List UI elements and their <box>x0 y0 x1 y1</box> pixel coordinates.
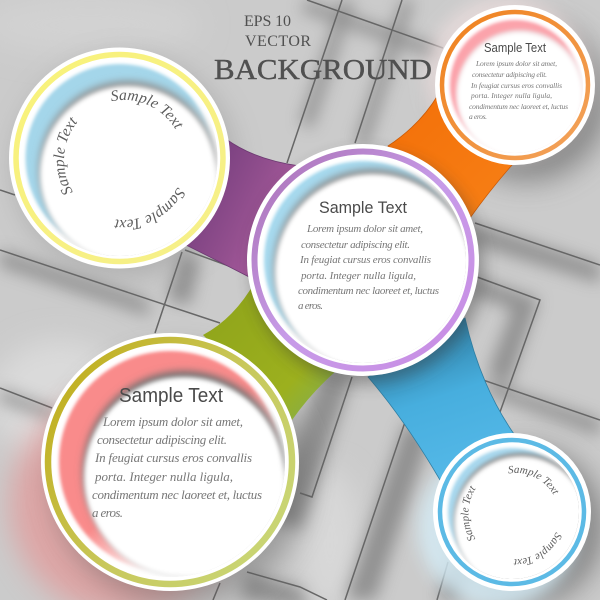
curved text: blue top: Sample Text <box>508 466 558 495</box>
body text: purple circle: porta. Integer nulla ligula, <box>300 270 416 282</box>
body text: orange circle <box>469 59 568 121</box>
curved text: yellow bottom: Sample Text <box>114 188 185 230</box>
crescent: purple circle <box>262 159 466 363</box>
heading: EPS 10 <box>244 13 291 30</box>
body text: green circle <box>92 414 262 520</box>
body text: purple circle: condimentum nec laoreet et, luctus <box>298 285 439 297</box>
heading: BACKGROUND <box>214 54 432 86</box>
body text: purple circle <box>298 223 439 312</box>
body text: orange circle: a eros. <box>469 112 487 121</box>
body text: green circle: a eros. <box>92 505 123 520</box>
curved text: blue bottom: Sample Text <box>514 532 562 566</box>
body text: green circle: Lorem ipsum dolor sit amet, <box>102 414 243 429</box>
heading: VECTOR <box>245 33 311 50</box>
body text: orange circle: porta. Integer nulla ligula, <box>470 91 552 100</box>
crescent: green circle <box>50 340 290 580</box>
body text: purple circle: In feugiat cursus eros convallis <box>299 254 431 266</box>
title: orange circle: Sample Text <box>484 41 546 55</box>
panel: blue circle <box>433 433 591 591</box>
panel: orange circle <box>435 5 595 165</box>
curved text: yellow left: Sample Text <box>53 117 78 195</box>
ribbon: purple <box>186 139 300 280</box>
title: purple circle: Sample Text <box>319 198 407 217</box>
curved text: yellow top: Sample Text <box>112 90 183 129</box>
heading <box>214 13 432 86</box>
body text: purple circle: Lorem ipsum dolor sit amet, <box>306 223 423 235</box>
crescent: orange circle <box>445 15 585 158</box>
curved text: blue left: Sample Text <box>460 486 476 541</box>
body text: orange circle: In feugiat cursus eros convallis <box>470 81 562 90</box>
body text: green circle: In feugiat cursus eros convallis <box>94 450 252 465</box>
body text: green circle: porta. Integer nulla ligula, <box>94 469 233 484</box>
crescent: blue circle <box>446 446 579 579</box>
panel: purple circle <box>247 144 479 376</box>
body text: green circle: condimentum nec laoreet et, luctus <box>92 487 262 502</box>
body text: purple circle: consectetur adipiscing elit. <box>301 239 410 251</box>
body text: orange circle: consectetur adipiscing elit. <box>472 70 547 79</box>
body text: green circle: consectetur adipiscing elit. <box>97 432 227 447</box>
ribbon: blue <box>368 318 514 480</box>
body text: purple circle: a eros. <box>298 300 323 312</box>
shadow of purple circle <box>252 152 484 384</box>
ribbon: green <box>203 280 335 420</box>
ribbon: orange <box>388 95 512 218</box>
title: green circle: Sample Text <box>119 385 223 407</box>
panel: green circle <box>41 333 299 591</box>
body text: orange circle: Lorem ipsum dolor sit amet, <box>475 59 557 68</box>
panel: yellow circle <box>9 48 230 268</box>
crescent: yellow circle <box>24 62 218 256</box>
body text: orange circle: condimentum nec laoreet et, luctus <box>469 102 568 111</box>
